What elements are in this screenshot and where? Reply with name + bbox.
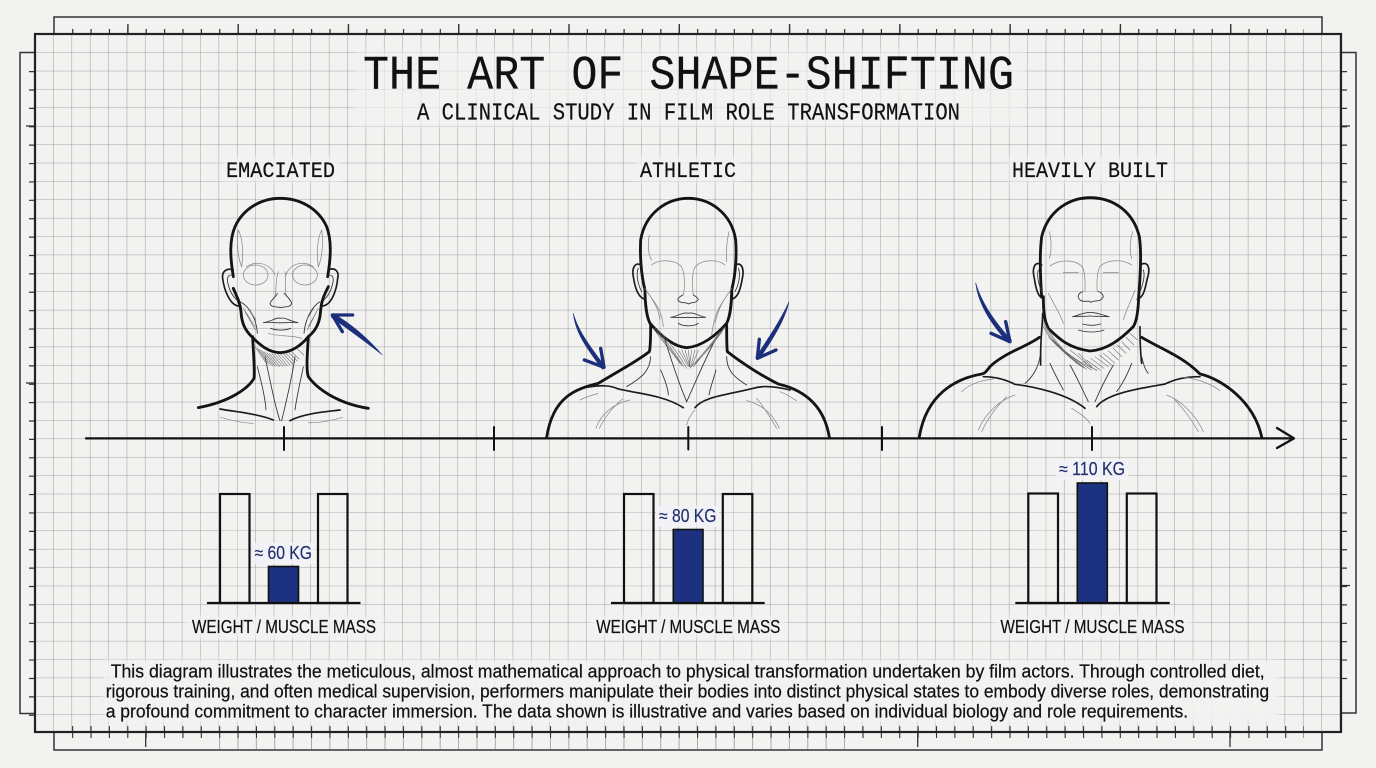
description paragraph: This diagram illustrates the meticulous, almost mathematical approach to physical transformation undertaken by film actors. Through controlled diet, [111,662,1265,682]
arrow: jaw hollow [331,313,382,355]
figure: emaciated head and neck [198,198,368,423]
description paragraph: rigorous training, and often medical supervision, performers manipulate their bodies into distinct physical states to embody diverse roles, demonstrating [106,682,1269,702]
value label: 80 kg: ≈ 80 KG [659,506,716,526]
axis caption: WEIGHT / MUSCLE MASS [1000,617,1184,637]
title: THE ART OF SHAPE-SHIFTING [363,50,1014,104]
panel: emaciated [192,159,382,637]
description paragraph: a profound commitment to character immersion. The data shown is illustrative and varies based on individual biology and role requirements. [106,702,1188,722]
heading: heavily built: HEAVILY BUILT [1012,159,1168,184]
arrow: neck mass [976,283,1012,343]
bar chart: about 80 kg [611,494,765,603]
bar chart: about 110 kg [1015,459,1170,603]
axis caption: WEIGHT / MUSCLE MASS [596,617,780,637]
description paragraph [106,662,1269,722]
figure: heavily built head and shoulders [919,198,1262,437]
figure: athletic head and shoulders [547,198,829,437]
arrow: left trapezius [573,313,606,369]
value label: 110 kg: ≈ 110 KG [1059,459,1125,479]
timeline axis with arrow [86,427,1294,450]
heading: athletic: ATHLETIC [640,159,736,184]
axis caption: WEIGHT / MUSCLE MASS [192,617,376,637]
arrow: right trapezius [756,302,789,359]
bar chart: about 60 kg [207,494,360,603]
subtitle: A CLINICAL STUDY IN FILM ROLE TRANSFORMATION [417,100,960,128]
panel: heavily built [919,159,1262,637]
panel: athletic [547,159,829,637]
value label: 60 kg: ≈ 60 KG [254,543,312,563]
halos behind text [104,50,1279,723]
heading: emaciated: EMACIATED [226,159,335,184]
